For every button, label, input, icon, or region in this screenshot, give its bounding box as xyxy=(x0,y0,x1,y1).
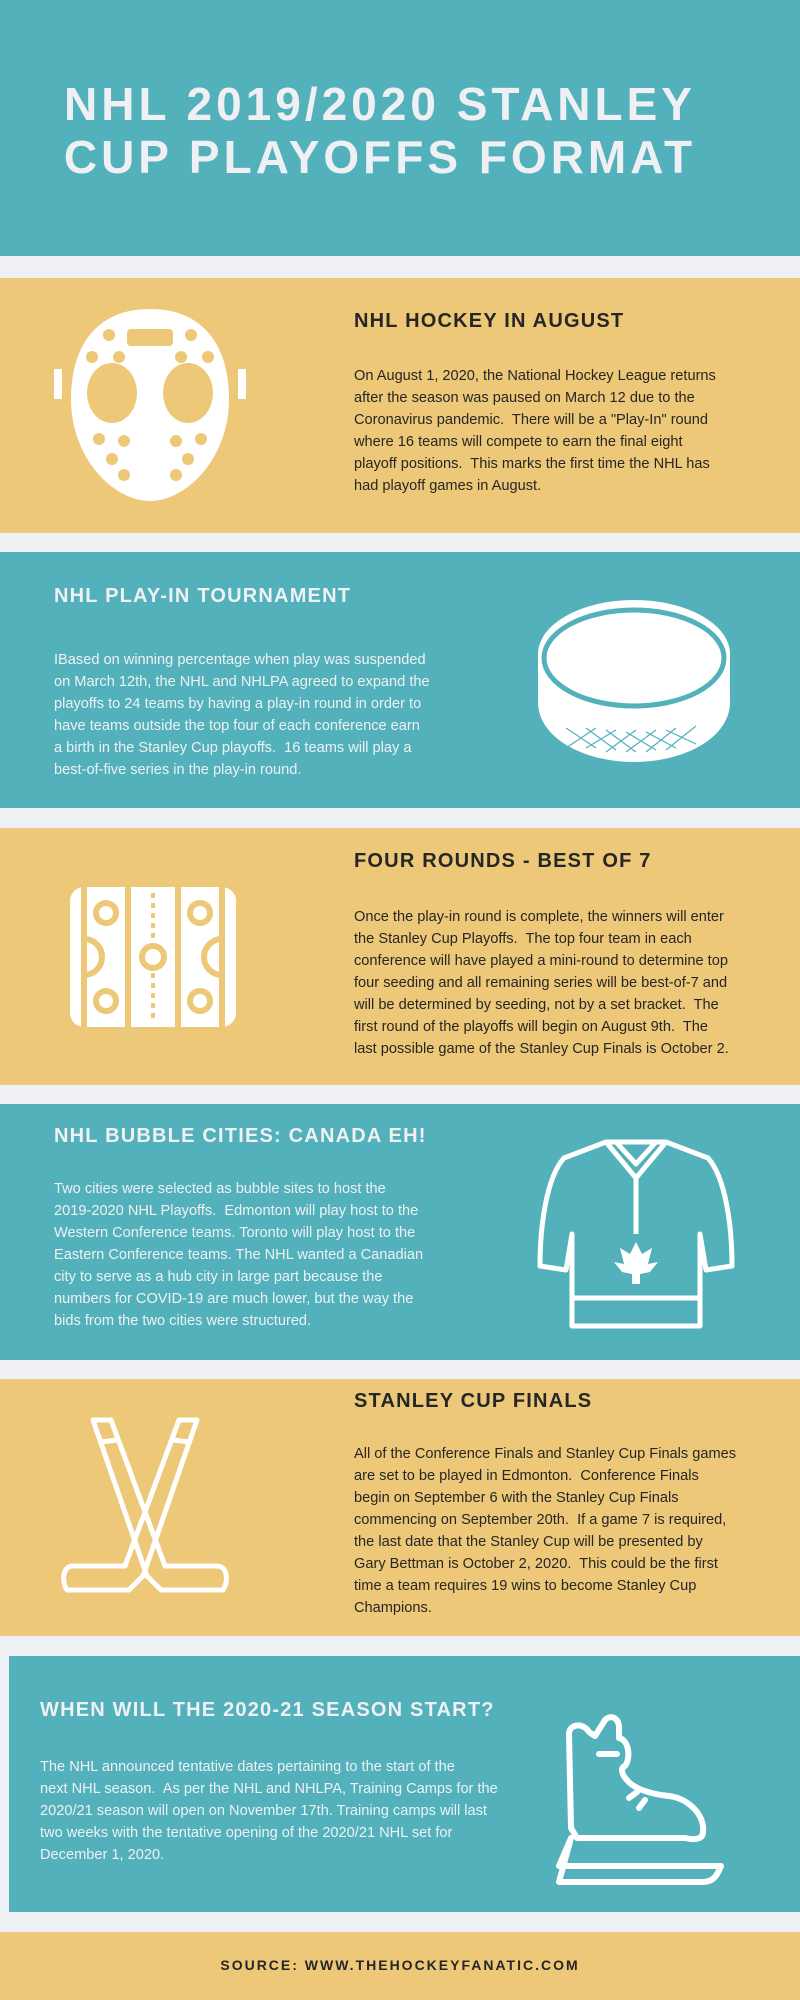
body text: playoff positions. This marks the first time the NHL has xyxy=(354,456,710,472)
body text: the Stanley Cup Playoffs. The top four team in each xyxy=(354,931,692,947)
body text: Once the play-in round is complete, the winners will enter xyxy=(354,909,724,925)
body text: playoffs to 24 teams by having a play-in round in order to xyxy=(54,696,421,712)
heading: NHL HOCKEY IN AUGUST xyxy=(354,310,624,332)
body text: are set to be played in Edmonton. Conference Finals xyxy=(354,1468,699,1484)
body text xyxy=(54,1181,423,1329)
header band xyxy=(0,0,800,256)
body text: begin on September 6 with the Stanley Cup Finals xyxy=(354,1490,678,1506)
body text: Two cities were selected as bubble sites to host the xyxy=(54,1181,386,1197)
body text: Champions. xyxy=(354,1600,432,1616)
body text xyxy=(40,1759,498,1863)
panel: play-in tournament xyxy=(0,552,800,808)
footer: source: SOURCE: WWW.THEHOCKEYFANATIC.COM xyxy=(220,1957,580,1973)
body text: December 1, 2020. xyxy=(40,1847,164,1863)
body text: 2020/21 season will open on November 17th. Training camps will last xyxy=(40,1803,487,1819)
body text: after the season was paused on March 12 due to the xyxy=(354,390,695,406)
body text: have teams outside the top four of each conference earn xyxy=(54,718,420,734)
panel: bubble cities xyxy=(0,1104,800,1360)
body text: 2019-2020 NHL Playoffs. Edmonton will play host to the xyxy=(54,1203,418,1219)
panel: four rounds xyxy=(0,828,800,1085)
body text: four seeding and all remaining series will be best-of-7 and xyxy=(354,975,727,991)
panel: 2020-21 season xyxy=(9,1656,800,1912)
footer: source xyxy=(0,1932,800,2000)
title: CUP PLAYOFFS FORMAT xyxy=(64,131,696,183)
body text: time a team requires 19 wins to become Stanley Cup xyxy=(354,1578,696,1594)
icon: goalie mask xyxy=(54,309,246,501)
body text: next NHL season. As per the NHL and NHLPA, Training Camps for the xyxy=(40,1781,498,1797)
body text xyxy=(54,652,430,778)
body text: city to serve as a hub city in large part because the xyxy=(54,1269,383,1285)
body text xyxy=(354,1446,736,1616)
body text: will be determined by seeding, not by a set bracket. The xyxy=(354,997,719,1013)
body text: where 16 teams will compete to earn the final eight xyxy=(354,434,683,450)
icon: crossed sticks xyxy=(61,1418,229,1592)
body text: numbers for COVID-19 are much lower, but the way the xyxy=(54,1291,413,1307)
body text: IBased on winning percentage when play was suspended xyxy=(54,652,426,668)
body text: a birth in the Stanley Cup playoffs. 16 teams will play a xyxy=(54,740,411,756)
body text: two weeks with the tentative opening of the 2020/21 NHL set for xyxy=(40,1825,452,1841)
body text: On August 1, 2020, the National Hockey League returns xyxy=(354,368,716,384)
title xyxy=(64,78,696,183)
body text: first round of the playoffs will begin on August 9th. The xyxy=(354,1019,708,1035)
title: NHL 2019/2020 STANLEY xyxy=(64,78,696,130)
body text xyxy=(354,909,729,1057)
icon: rink xyxy=(70,887,236,1027)
icon: skate xyxy=(556,1714,724,1885)
body text: conference will have played a mini-round to determine top xyxy=(354,953,728,969)
body text: The NHL announced tentative dates pertaining to the start of the xyxy=(40,1759,455,1775)
icon: jersey xyxy=(538,1140,734,1328)
heading: STANLEY CUP FINALS xyxy=(354,1390,592,1412)
body text: Gary Bettman is October 2, 2020. This could be the first xyxy=(354,1556,718,1572)
body text xyxy=(354,368,716,494)
heading: NHL PLAY-IN TOURNAMENT xyxy=(54,585,351,607)
body text: last possible game of the Stanley Cup Finals is October 2. xyxy=(354,1041,729,1057)
body text: Eastern Conference teams. The NHL wanted a Canadian xyxy=(54,1247,423,1263)
heading: NHL BUBBLE CITIES: CANADA EH! xyxy=(54,1125,427,1147)
body text: had playoff games in August. xyxy=(354,478,541,494)
panel: stanley cup finals xyxy=(0,1379,800,1636)
body text: the last date that the Stanley Cup will be presented by xyxy=(354,1534,703,1550)
body text: on March 12th, the NHL and NHLPA agreed to expand the xyxy=(54,674,430,690)
panel: hockey in august xyxy=(0,278,800,533)
body text: Western Conference teams. Toronto will play host to the xyxy=(54,1225,415,1241)
heading: FOUR ROUNDS - BEST OF 7 xyxy=(354,850,652,872)
body text: best-of-five series in the play-in round. xyxy=(54,762,301,778)
body text: commencing on September 20th. If a game 7 is required, xyxy=(354,1512,726,1528)
body text: Coronavirus pandemic. There will be a "Play-In" round xyxy=(354,412,708,428)
body text: bids from the two cities were structured. xyxy=(54,1313,311,1329)
icon: puck xyxy=(538,600,730,762)
heading: WHEN WILL THE 2020-21 SEASON START? xyxy=(40,1699,495,1721)
body text: All of the Conference Finals and Stanley Cup Finals games xyxy=(354,1446,736,1462)
